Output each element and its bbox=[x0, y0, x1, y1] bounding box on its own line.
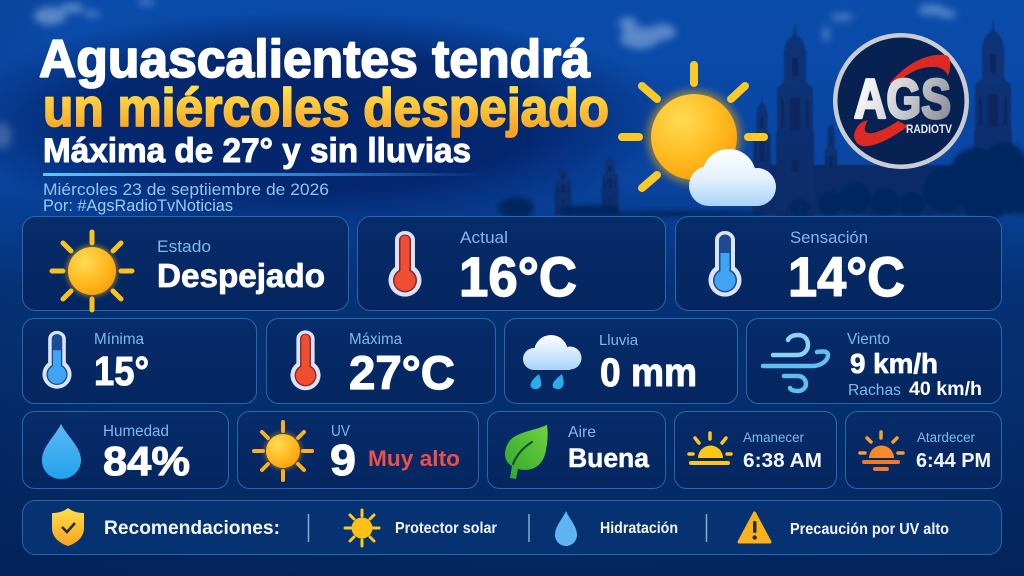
label: uv: UV bbox=[331, 423, 351, 440]
panel: viento bbox=[746, 318, 1002, 404]
panel: maxima bbox=[266, 318, 496, 404]
text: precaucion: Precaución por UV alto bbox=[790, 521, 949, 538]
label: estado: Estado bbox=[157, 237, 211, 256]
title rule bbox=[43, 173, 488, 176]
value: muy alto: Muy alto bbox=[368, 446, 460, 471]
value: 9: 9 bbox=[330, 436, 356, 485]
icon: small sun bbox=[345, 510, 379, 546]
label: viento: Viento bbox=[847, 331, 890, 348]
icon: sunrise bbox=[689, 433, 731, 465]
title line 2: un miércoles despejado bbox=[43, 78, 609, 138]
panel: atardecer bbox=[846, 412, 1002, 488]
icon: leaf bbox=[505, 425, 548, 479]
value: 84%: 84% bbox=[103, 438, 190, 484]
icon: small drop bbox=[555, 511, 577, 546]
logo swoosh bbox=[854, 55, 950, 146]
label: atardecer: Atardecer bbox=[917, 430, 975, 445]
value: sunset time: 6:44 PM bbox=[916, 449, 991, 472]
value: buena: Buena bbox=[568, 443, 650, 473]
value: 9 km/h: 9 km/h bbox=[850, 348, 938, 379]
icon: orange sun bbox=[254, 422, 312, 480]
panel: sensacion bbox=[676, 216, 1002, 310]
value: 16°C: 16°C bbox=[459, 245, 577, 308]
title block bbox=[39, 30, 609, 170]
byline: Por: #AgsRadioTvNoticias bbox=[43, 197, 233, 215]
label: amanecer: Amanecer bbox=[743, 430, 804, 445]
label: minima: Mínima bbox=[94, 331, 144, 348]
label: maxima: Máxima bbox=[349, 331, 402, 348]
panel: amanecer bbox=[674, 412, 836, 488]
icon: red thermometer bbox=[290, 330, 321, 390]
value: 27°C: 27°C bbox=[349, 346, 455, 399]
logo: AGS RadioTV bbox=[833, 33, 969, 169]
panel: actual bbox=[358, 216, 666, 310]
icon: red thermometer bbox=[388, 231, 422, 297]
icon: blue thermometer bbox=[42, 331, 72, 389]
panel: humedad bbox=[22, 412, 228, 488]
panel: minima bbox=[22, 318, 256, 404]
value: sunrise time: 6:38 AM bbox=[743, 449, 822, 472]
icon: warning triangle bbox=[739, 513, 770, 542]
logo radiotv: RADIOTV bbox=[906, 122, 952, 136]
icon: shield bbox=[52, 508, 84, 546]
value: 0 mm: 0 mm bbox=[600, 351, 697, 395]
panel: estado bbox=[22, 216, 348, 310]
value: 15°: 15° bbox=[94, 348, 149, 394]
icon: rain cloud bbox=[523, 335, 582, 389]
label: actual: Actual bbox=[460, 228, 508, 247]
panel: recomendaciones bbox=[22, 500, 1002, 554]
icon: sunset bbox=[860, 432, 903, 471]
icon: water drop bbox=[42, 424, 81, 479]
label: sensacion: Sensación bbox=[790, 228, 868, 247]
icon: blue thermometer bbox=[708, 231, 742, 297]
subtitle: Máxima de 27° y sin lluvias bbox=[43, 132, 471, 170]
panel: uv bbox=[238, 412, 478, 488]
icon: wind bbox=[763, 335, 828, 391]
date line: Miércoles 23 de septiiembre de 2026 bbox=[43, 181, 329, 199]
text: hidratacion: Hidratación bbox=[600, 520, 678, 537]
value: 14°C: 14°C bbox=[788, 245, 905, 308]
text: protector solar: Protector solar bbox=[395, 520, 497, 537]
label: aire: Aire bbox=[568, 424, 596, 441]
label: humedad: Humedad bbox=[103, 423, 169, 440]
logo wordmark: AGS bbox=[854, 67, 951, 130]
icon: big sun with cloud bbox=[622, 65, 776, 206]
panel: aire bbox=[488, 412, 666, 488]
label: rachas: Rachas bbox=[848, 382, 901, 399]
value: despejado: Despejado bbox=[157, 257, 325, 294]
label: lluvia: Lluvia bbox=[599, 332, 639, 349]
icon: sun bbox=[52, 232, 132, 310]
panel: lluvia bbox=[504, 318, 738, 404]
title line 1: Aguascalientes tendrá bbox=[39, 30, 590, 89]
value: 40 km/h: 40 km/h bbox=[909, 379, 982, 400]
heading: recomendaciones: Recomendaciones: bbox=[104, 518, 280, 539]
cathedral silhouette bbox=[498, 18, 1024, 222]
